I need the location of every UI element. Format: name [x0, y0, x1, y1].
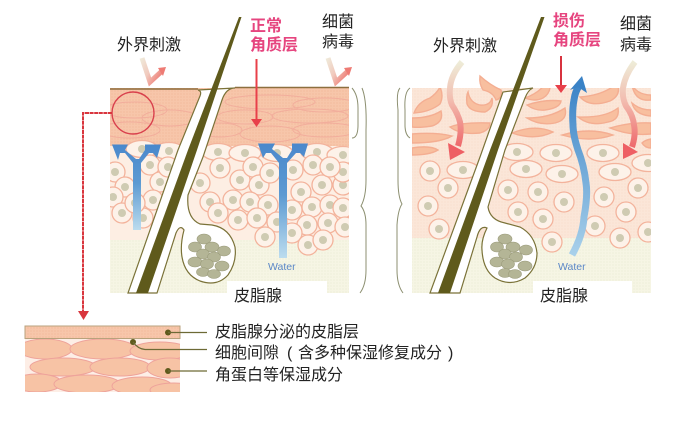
arrow to detail	[78, 113, 112, 320]
flakes	[412, 88, 651, 156]
panel: healthy skin	[78, 17, 366, 320]
label: sebaceous gland left: 皮脂腺	[234, 287, 282, 305]
legend text: intercellular: 细胞间隙	[215, 345, 279, 362]
water label: Water	[558, 261, 586, 273]
sebum layer	[25, 326, 180, 338]
loose cells	[418, 144, 664, 252]
label: normal corneum: 角质层	[250, 35, 298, 54]
panel: magnified detail	[24, 326, 207, 392]
brace	[352, 88, 366, 293]
legend text: sebum: 皮脂腺分泌的皮脂层	[215, 323, 359, 341]
label: external stimulus left: 外界刺激	[117, 36, 181, 54]
water arrow left	[112, 144, 161, 230]
magnifier circle	[112, 92, 154, 134]
icon: bacteria deflected	[328, 58, 352, 82]
label: normal corneum: 正常	[250, 18, 282, 35]
bacteria arrow penetrating	[623, 62, 638, 159]
healthy skin background	[110, 88, 349, 293]
panel: damaged skin	[397, 17, 664, 293]
legend text: intercellular: 含多种保湿修复成分	[298, 344, 442, 362]
label: bacteria right: 细菌	[620, 16, 652, 33]
red arrow to corneum	[251, 59, 262, 127]
stratum corneum	[100, 95, 357, 142]
label: bacteria right: 病毒	[620, 36, 652, 54]
label: external stimulus right: 外界刺激	[433, 37, 497, 55]
follicle channel	[430, 88, 537, 293]
sebaceous gland cells	[490, 234, 532, 278]
cell layer	[103, 140, 359, 255]
sebaceous gland cells	[188, 234, 230, 278]
label plate	[227, 281, 327, 306]
label: bacteria left: 病毒	[322, 33, 354, 51]
stimulus arrow penetrating	[448, 62, 465, 160]
icon: stimulus deflected left	[142, 58, 166, 82]
flake above the surface left of hair	[480, 76, 501, 100]
water label: Water	[268, 261, 296, 273]
label: damaged corneum: 损伤	[553, 13, 585, 30]
intercellular layer	[25, 339, 180, 392]
damaged skin background	[412, 88, 651, 293]
water arrow right	[258, 144, 308, 258]
label: bacteria left: 细菌	[322, 14, 354, 31]
water arrow rising	[570, 76, 587, 255]
hair	[438, 17, 544, 293]
pointer: keratin	[165, 368, 207, 374]
legend text: intercellular: )	[448, 345, 453, 362]
legend text: intercellular: (	[287, 345, 293, 362]
red arrow to corneum	[555, 56, 567, 93]
label: sebaceous gland right: 皮脂腺	[540, 287, 588, 305]
hair	[136, 17, 242, 293]
pointer: intercellular	[130, 339, 207, 350]
legend text: keratin: 角蛋白等保湿成分	[215, 366, 343, 384]
label plate	[533, 281, 632, 306]
surface line	[110, 88, 349, 89]
label: damaged corneum: 角质层	[553, 30, 601, 49]
follicle channel	[128, 88, 235, 293]
pointer: sebum	[165, 330, 207, 336]
brace	[397, 88, 410, 293]
